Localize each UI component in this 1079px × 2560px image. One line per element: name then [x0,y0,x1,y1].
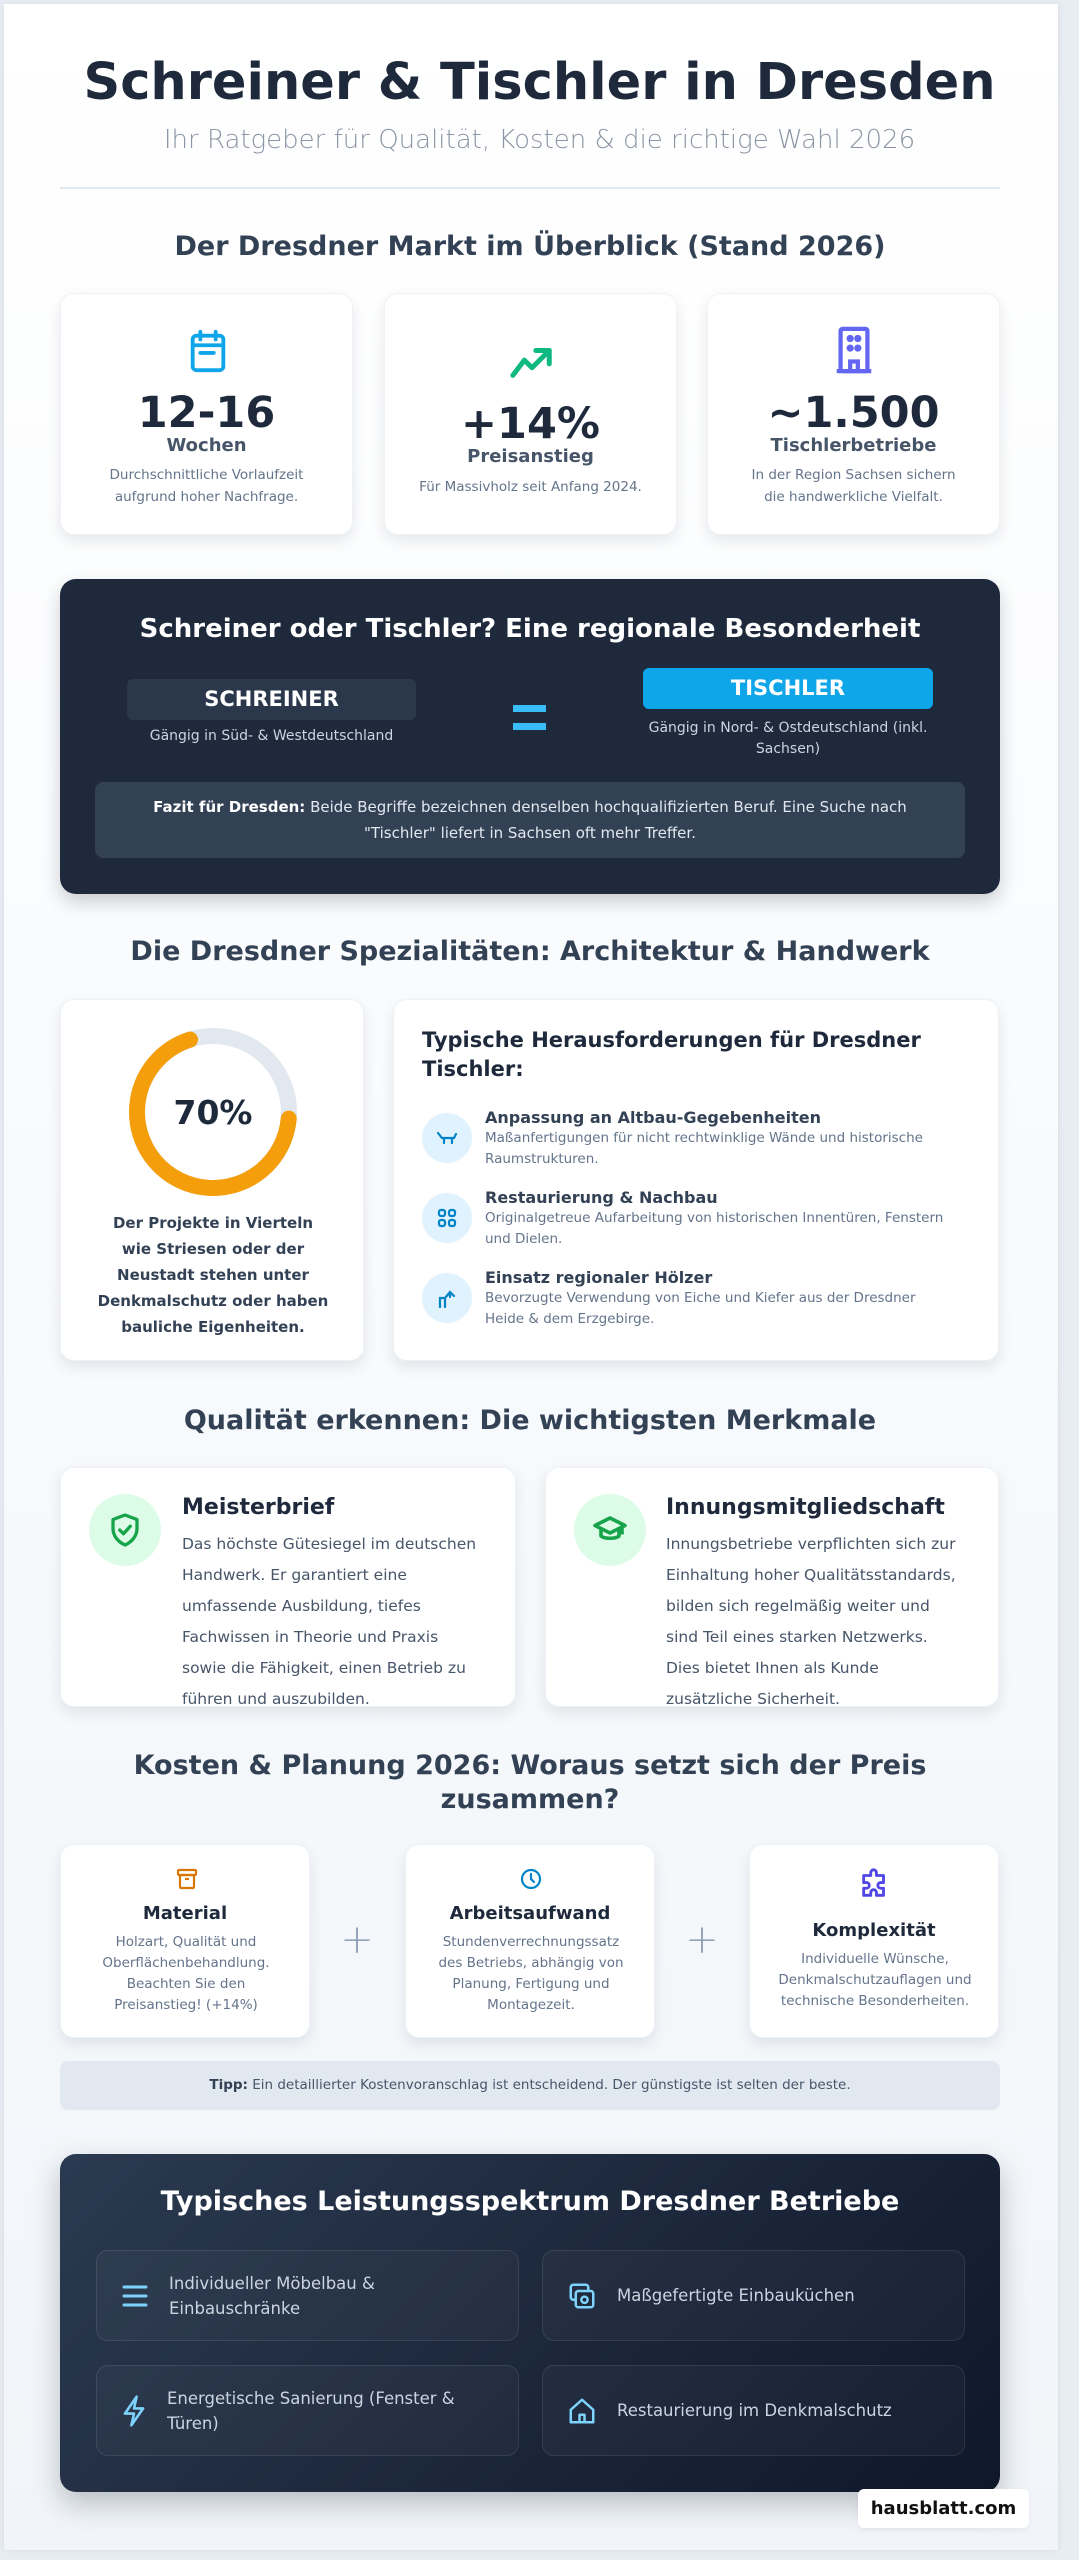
item: Hölzer: Bevorzugte Verwendung von Eiche und Kiefer aus der Dresdner Heide & dem Erzgebirge. [485,1290,916,1327]
cost card: Material [60,1844,310,2038]
card: Innung: Innungsbetriebe verpflichten sich zur [666,1535,955,1553]
item: Hölzer [422,1268,916,1327]
badge: hausblatt.com [858,2489,1029,2528]
icon [422,1113,472,1163]
icon [422,1193,472,1243]
cost card: Material: Holzart, Qualität und Oberflächenbehandlung. Beachten Sie den Preisanstieg! (+14%) [102,1934,270,2013]
item: Sanierung: Energetische Sanierung (Fenster & [167,2388,455,2408]
item: Sanierung: Türen) [167,2414,219,2432]
item: Küchen: Maßgefertigte Einbauküchen [617,2286,855,2305]
card: Meisterbrief: umfassende Ausbildung, tiefes [182,1597,421,1615]
card: Meisterbrief [60,1467,516,1707]
panel: Schreiner oder Tischler: Gängig in Nord- & Ostdeutschland (inkl. Sachsen) [649,720,927,757]
cost card: Arbeitsaufwand: Arbeitsaufwand [450,1903,610,1924]
icon: puzzle [862,1868,885,1897]
item: Küchen [542,2250,965,2341]
stat card: Betriebe: die handwerkliche Vielfalt. [764,489,943,505]
icon: plus: + [685,1917,719,1963]
text: Neustadt stehen unter [117,1266,309,1284]
icon: plus: + [340,1917,374,1963]
icon: graduation [574,1494,646,1566]
donut chart 70%: 70% [174,1093,252,1132]
item: Altbau: Maßanfertigungen für nicht rechtwinklige Wände und historische Raumstrukturen. [485,1130,923,1167]
stat card: Betriebe: ~1.500 [767,388,940,438]
card: Meisterbrief: Fachwissen in Theorie und Praxis [182,1628,438,1646]
title: Schreiner & Tischler in Dresden [83,53,996,112]
text [98,1214,328,1336]
heading: market: Der Dresdner Markt im Überblick (Stand 2026) [174,231,886,262]
text: Denkmalschutz oder haben [98,1292,328,1310]
callout: Fazit: Fazit für Dresden: Beide Begriffe bezeichnen denselben hochqualifizierten Beruf. Eine Suche nach [153,798,907,816]
heading: Typisches Leistungsspektrum Dresdner Betriebe [161,2186,899,2217]
card: Meisterbrief: führen und auszubilden. [182,1690,370,1708]
stat card: Preisanstieg: Für Massivholz seit Anfang 2024. [419,479,642,495]
panel: Schreiner oder Tischler: Gängig in Süd- & Westdeutschland [150,728,393,744]
box: Schreiner: SCHREINER [204,687,339,711]
callout: Tipp: Tipp: Ein detaillierter Kostenvoranschlag ist entscheidend. Der günstigste ist selten der beste. [209,2077,851,2093]
card: Meisterbrief: sowie die Fähigkeit, einen Betrieb zu [182,1659,466,1677]
item: Hölzer: Einsatz regionaler Hölzer [485,1268,712,1287]
card: Innung [545,1467,999,1707]
cost card: Arbeitsaufwand [405,1844,655,2038]
item: Restaurierung: Originalgetreue Aufarbeitung von historischen Innentüren, Fenstern [485,1210,943,1226]
text: bauliche Eigenheiten. [121,1318,305,1336]
stat card: Preisanstieg [384,293,677,535]
stat card: Betriebe: Tischlerbetriebe [771,435,936,456]
heading: Spezialitäten: Die Dresdner Spezialitäten: Architektur & Handwerk [130,936,930,967]
item: Möbelbau: Individueller Möbelbau & [169,2274,375,2292]
box: Schreiner [127,679,416,720]
panel: donut [60,999,364,1361]
item: Restaurierung: Restaurierung & Nachbau [485,1188,718,1207]
text: wie Striesen oder der [122,1240,304,1258]
cost card: Komplexität: Komplexität [812,1920,936,1941]
icon: trend up [510,348,552,378]
callout: Tipp [60,2061,1000,2110]
heading: Schreiner oder Tischler? Eine regionale Besonderheit [140,614,920,644]
icon: box [176,1868,198,1890]
badge: hausblatt.com: hausblatt.com [871,2498,1016,2519]
cost card: Arbeitsaufwand: Stundenverrechnungssatz des Betriebs, abhängig von Planung, Fertigung und Montagezeit. [438,1934,624,2013]
donut chart 70% [129,1028,297,1196]
stat card: Preisanstieg: +14% [461,399,600,449]
card: Innung: bilden sich regelmäßig weiter und [666,1597,930,1615]
item: Sanierung [96,2365,519,2456]
card: Innung: Einhaltung hoher Qualitätsstandards, [666,1566,956,1584]
box: Tischler: TISCHLER [731,676,845,700]
item: Altbau: Anpassung an Altbau-Gegebenheiten [485,1108,821,1127]
card: Innung: Dies bietet Ihnen als Kunde [666,1659,879,1677]
icon: calendar [190,330,226,372]
card: Innung: zusätzliche Sicherheit. [666,1690,840,1708]
item: Denkmalschutz: Restaurierung im Denkmalschutz [617,2401,892,2420]
icon: clock [520,1868,542,1890]
item: Restaurierung: und Dielen. [485,1231,562,1247]
stat card: Betriebe: In der Region Sachsen sichern [752,467,956,483]
card: Meisterbrief: Das höchste Gütesiegel im deutschen [182,1535,476,1553]
item: Möbelbau [96,2250,519,2341]
icon: shield [89,1494,161,1566]
icon [422,1273,472,1323]
item: Restaurierung [422,1188,943,1247]
box: Tischler [643,668,933,709]
stat card: Wochen: Durchschnittliche Vorlaufzeit [110,467,303,483]
stat card: Wochen: Wochen [166,435,247,456]
heading: Qualität: Qualität erkennen: Die wichtigsten Merkmale [184,1405,876,1436]
card: Meisterbrief: Meisterbrief [182,1495,334,1520]
cost card: Material: Material [143,1903,227,1924]
stat card: Preisanstieg: Preisanstieg [467,446,594,467]
cost card: Komplexität: Individuelle Wünsche, Denkmalschutzauflagen und technische Besonderheiten. [778,1951,972,2009]
icon: equals [513,705,546,730]
panel: Herausforderungen [393,999,999,1361]
icon: building [836,326,872,374]
text: Der Projekte in Vierteln [113,1214,313,1232]
card: Innung: sind Teil eines starken Netzwerks. [666,1628,928,1646]
card: Innung: Innungsmitgliedschaft [666,1495,945,1520]
cost card: Komplexität [749,1844,999,2038]
item: Altbau [422,1108,923,1167]
stat card: Wochen [60,293,353,535]
panel: Leistungsspektrum [60,2154,1000,2492]
card: Meisterbrief: Handwerk. Er garantiert eine [182,1566,407,1584]
item: Möbelbau: Einbauschränke [169,2298,300,2318]
stat card: Betriebe [707,293,1000,535]
heading: Kosten: Kosten & Planung 2026: Woraus setzt sich der Preis zusammen? [134,1750,926,1815]
callout: Fazit [95,782,965,858]
item: Denkmalschutz [542,2365,965,2456]
stat card: Wochen: aufgrund hoher Nachfrage. [115,489,298,505]
callout: Fazit: "Tischler" liefert in Sachsen oft mehr Treffer. [364,824,696,842]
heading: Typische Herausforderungen für Dresdner Tischler: [422,1028,921,1081]
stat card: Wochen: 12-16 [138,388,275,438]
panel: Schreiner oder Tischler [60,579,1000,894]
subtitle: Ihr Ratgeber für Qualität, Kosten & die richtige Wahl 2026 [164,125,915,155]
